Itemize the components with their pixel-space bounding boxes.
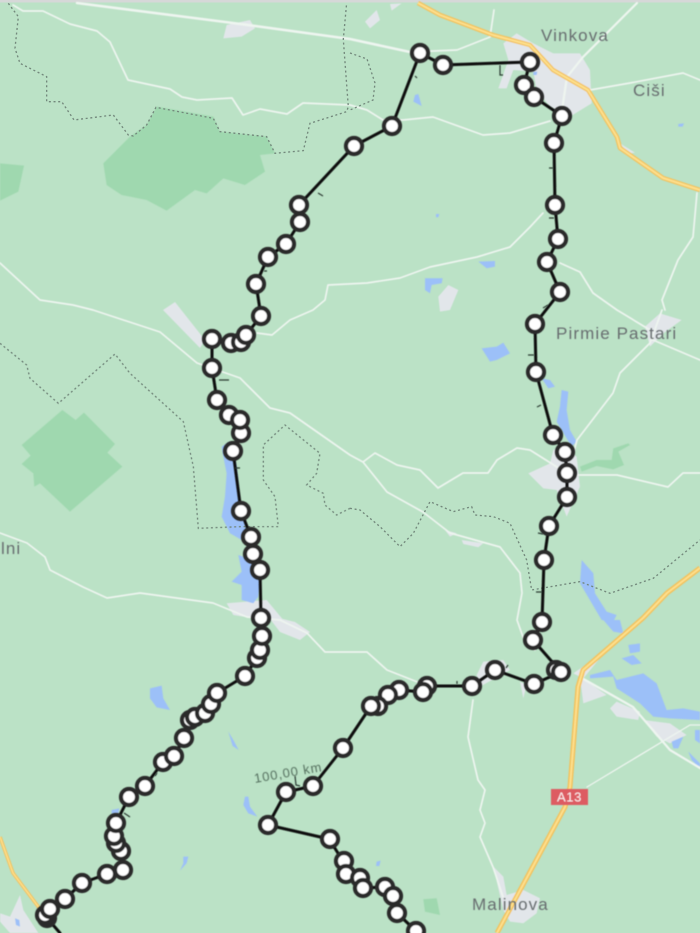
label: Malinova: Malinova — [472, 895, 549, 914]
route waypoint markers — [37, 45, 575, 933]
A13 highway south section — [497, 568, 700, 933]
top edge strip — [0, 0, 700, 2]
label: Vinkova: Vinkova — [541, 26, 609, 45]
label: Pirmie Pastari: Pirmie Pastari — [556, 324, 677, 343]
distance ticks — [124, 65, 554, 817]
road shield A13: A13 — [557, 790, 582, 804]
distance label: 100,00 km — [253, 759, 323, 786]
forest areas — [0, 92, 630, 915]
administrative borders — [0, 3, 700, 593]
label: lni: lni — [1, 539, 21, 558]
route line — [47, 53, 567, 933]
A13 highway north section — [418, 3, 700, 190]
west highway section — [0, 837, 43, 913]
label: Ciši: Ciši — [633, 81, 666, 100]
road shield A13 — [551, 789, 588, 805]
